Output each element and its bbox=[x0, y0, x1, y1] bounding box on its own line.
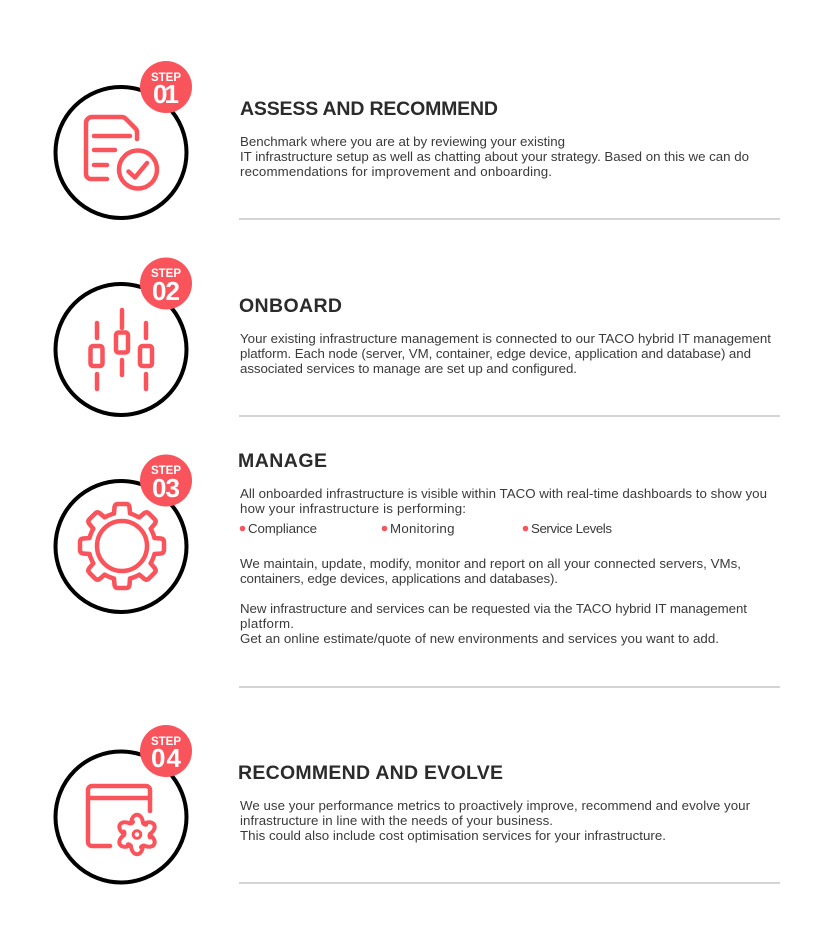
heading: recommend and evolve: RECOMMEND AND EVOLVE bbox=[238, 762, 503, 784]
text block: step 3 intro: how your infrastructure is performing: bbox=[240, 501, 466, 516]
panel: step 3 manage bbox=[56, 450, 767, 646]
text block: step 1 description bbox=[240, 134, 749, 179]
heading: onboard: ONBOARD bbox=[239, 295, 342, 317]
bullet list bbox=[240, 521, 612, 536]
text block: step 1 description: recommendations for improvement and onboarding. bbox=[240, 164, 552, 179]
icon: document with check mark bbox=[86, 117, 157, 188]
text block: step 3 new services: platform. bbox=[240, 616, 294, 631]
badge: step 02: 02 bbox=[152, 276, 180, 306]
badge: step 04 bbox=[140, 725, 192, 777]
text block: step 3 maintenance: We maintain, update, modify, monitor and report on all your connected servers, VMs, bbox=[240, 556, 741, 571]
text block: step 3 new services bbox=[240, 601, 747, 646]
text block: step 4 description: This could also include cost optimisation services for your infrastructure. bbox=[240, 828, 666, 843]
text block: step 3 intro: All onboarded infrastructure is visible within TACO with real-time dashboards to show you bbox=[240, 486, 767, 501]
badge: step 02: STEP bbox=[151, 268, 181, 280]
badge: step 03: STEP bbox=[151, 465, 181, 477]
badge: step 03: 03 bbox=[152, 473, 180, 503]
panel: step 2 onboard bbox=[56, 258, 771, 415]
badge: step 01: STEP bbox=[151, 72, 181, 84]
panel: step 1 assess and recommend bbox=[56, 61, 749, 218]
text block: step 2 description: Your existing infrastructure management is connected to our TACO hybrid IT management bbox=[240, 331, 771, 346]
heading: assess and recommend: ASSESS AND RECOMMEND bbox=[240, 98, 498, 120]
bullet list: Service Levels bbox=[531, 521, 612, 536]
text block: step 3 maintenance bbox=[240, 556, 741, 586]
icon: window with cog bbox=[88, 786, 159, 854]
badge: step 04: 04 bbox=[151, 743, 182, 773]
text block: step 2 description bbox=[240, 331, 771, 376]
text block: step 3 maintenance: containers, edge devices, applications and databases). bbox=[240, 571, 558, 586]
icon: gear bbox=[80, 504, 164, 588]
badge: step 02 bbox=[140, 258, 192, 310]
text block: step 4 description: We use your performance metrics to proactively improve, recommend and evolve your bbox=[240, 798, 751, 813]
text block: step 1 description: IT infrastructure setup as well as chatting about your strategy. Based on this we can do bbox=[240, 149, 749, 164]
icon: step 1 ring bbox=[56, 87, 186, 218]
badge: step 01 bbox=[140, 61, 192, 113]
icon: step 4 ring bbox=[56, 752, 186, 882]
icon: step 3 ring bbox=[56, 481, 186, 612]
text block: step 3 new services: Get an online estimate/quote of new environments and services you want to add. bbox=[240, 631, 719, 646]
text block: step 2 description: platform. Each node (server, VM, container, edge device, application and database) and bbox=[240, 346, 751, 361]
text block: step 1 description: Benchmark where you are at by reviewing your existing bbox=[240, 134, 565, 149]
heading: manage: MANAGE bbox=[238, 450, 327, 472]
bullet list: Monitoring bbox=[390, 521, 454, 536]
icon: step 2 ring bbox=[56, 284, 186, 415]
badge: step 04: STEP bbox=[151, 736, 181, 748]
bullet list: Compliance bbox=[248, 521, 317, 536]
icon: sliders bbox=[90, 310, 152, 389]
text block: step 4 description: infrastructure in line with the needs of your business. bbox=[240, 813, 553, 828]
panel: step 4 recommend and evolve bbox=[56, 725, 751, 882]
text block: step 3 intro bbox=[240, 486, 767, 516]
text block: step 2 description: associated services to manage are set up and configured. bbox=[240, 361, 577, 376]
badge: step 03 bbox=[140, 454, 192, 506]
badge: step 01: 01 bbox=[153, 79, 179, 109]
text block: step 3 new services: New infrastructure and services can be requested via the TACO hybrid IT management bbox=[240, 601, 747, 616]
text block: step 4 description bbox=[240, 798, 751, 843]
